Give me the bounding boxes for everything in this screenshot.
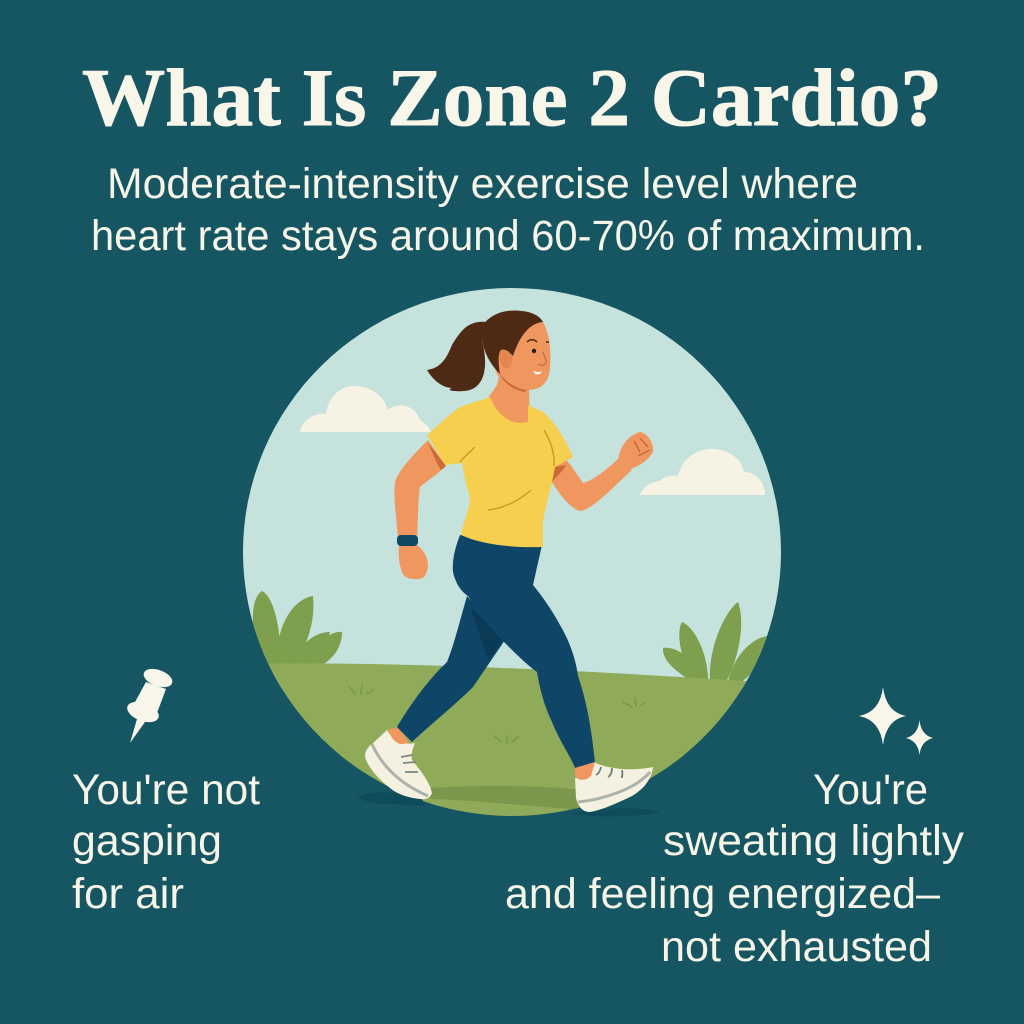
left note text (72, 767, 260, 918)
subtitle text block (91, 161, 925, 260)
right note text: You're (813, 767, 928, 814)
front arm (552, 459, 632, 511)
neck (488, 372, 530, 425)
icon: sparkles (859, 687, 933, 755)
subtitle text block: heart rate stays around 60-70% of maximum. (91, 213, 925, 260)
shirt folds (460, 430, 554, 510)
shirt (427, 397, 573, 547)
panel: circular park scene (240, 288, 790, 830)
ground (268, 663, 746, 816)
ear (499, 350, 512, 369)
fist (618, 432, 653, 469)
cloud right (640, 449, 765, 495)
foot shadows (357, 792, 660, 817)
right ankle (575, 762, 595, 780)
bush left (253, 591, 342, 666)
left note text: gasping (72, 818, 222, 865)
subtitle text block: Moderate-intensity exercise level where (107, 161, 858, 208)
bush right (663, 602, 768, 684)
front arm sleeve shadow (551, 465, 566, 483)
right note text (505, 767, 965, 971)
facial features (527, 340, 549, 374)
runner (365, 310, 653, 812)
back hand (399, 545, 428, 579)
back arm (394, 440, 446, 540)
right note text: not exhausted (661, 924, 932, 971)
face (488, 320, 550, 390)
sky (243, 288, 781, 688)
right note text: sweating lightly (663, 818, 965, 865)
icon: push pin (124, 665, 175, 743)
right note text: and feeling energized– (505, 871, 940, 918)
left shoe (365, 730, 432, 799)
cloud left (300, 386, 431, 432)
ponytail (427, 322, 488, 391)
hair (482, 310, 543, 374)
ground shadow (430, 786, 582, 810)
right shoe (575, 762, 653, 812)
left shoe laces (401, 755, 418, 772)
grass tufts (349, 685, 645, 743)
wristband (397, 535, 418, 546)
back leg (397, 596, 505, 742)
chin shadow (500, 374, 527, 392)
left note text: for air (72, 871, 184, 918)
back arm sleeve shadow (428, 443, 446, 470)
front leg (453, 535, 595, 768)
left ankle (388, 727, 409, 744)
left note text: You're not (72, 767, 260, 814)
title: What Is Zone 2 Cardio? (82, 52, 942, 143)
